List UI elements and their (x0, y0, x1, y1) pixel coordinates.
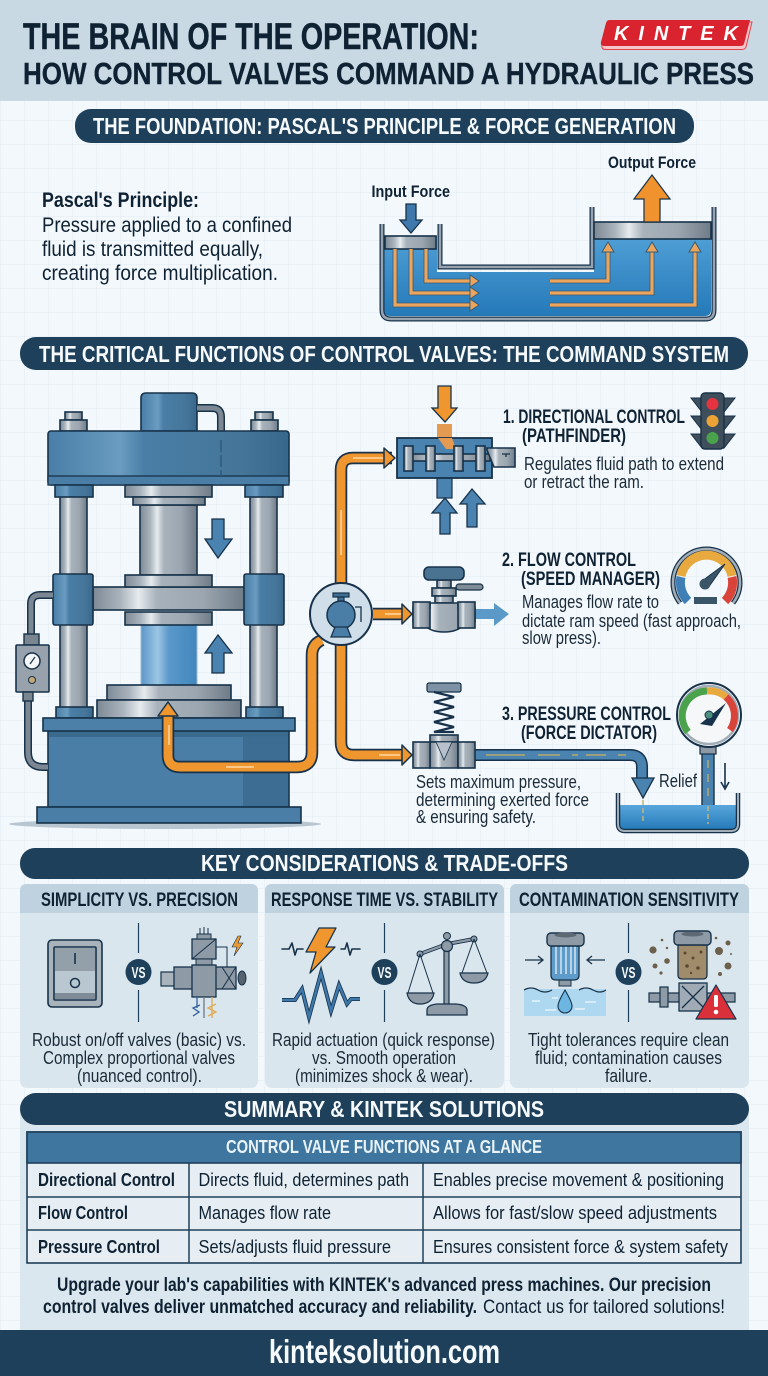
logo: KINTEK (601, 20, 752, 50)
blue outlet arrow (475, 603, 509, 626)
platen (97, 685, 241, 718)
description: (nuanced control). (77, 1066, 202, 1086)
bolts (60, 412, 278, 431)
spring cap (427, 683, 461, 692)
description: (minimizes shock & wear). (295, 1066, 473, 1086)
top port (437, 424, 452, 439)
table: valve functions: Sets/adjusts fluid pressure (198, 1236, 391, 1257)
table: valve functions: Directs fluid, determines path (198, 1169, 409, 1190)
valve body (430, 735, 458, 742)
knob (424, 567, 464, 580)
label: output force: Output Force (608, 153, 696, 172)
bottom port (437, 478, 452, 498)
label: input force: Input Force (372, 182, 450, 201)
divider and vs badge: VS (132, 965, 146, 982)
panel: contamination sensitivity (510, 884, 749, 1088)
hydraulic fluid column (141, 625, 197, 685)
icon: proportional valve (161, 927, 246, 1018)
top hose (197, 408, 221, 431)
icon: directional control valve (397, 386, 515, 534)
section heading: foundation (75, 109, 694, 143)
text block: directional control: 1. DIRECTIONAL CONTROL (503, 406, 685, 428)
divider and vs badge: VS (622, 965, 636, 982)
flow arrows: input (395, 248, 695, 305)
columns (60, 490, 277, 718)
text block: directional control: (PATHFINDER) (522, 425, 626, 447)
control box with gauge (16, 634, 49, 701)
table: valve functions: Directional Control (38, 1169, 175, 1190)
icon: relief tank and pressure gauge (618, 683, 741, 831)
description: fluid; contamination causes (535, 1048, 722, 1068)
text block: Pascal's principle: Pascal's Principle: (42, 189, 199, 212)
call to action: control valves deliver unmatched accuracy and reliability. (43, 1297, 477, 1318)
handle (456, 584, 483, 590)
icon: pressure relief valve (413, 683, 654, 798)
arrow: ram down (205, 519, 232, 558)
description: vs. Smooth operation (312, 1048, 456, 1068)
ram (140, 505, 197, 575)
text block: directional control: Regulates fluid path to extend (524, 454, 724, 474)
table: valve functions: CONTROL VALVE FUNCTIONS AT A GLANCE (226, 1137, 542, 1157)
top cylinder (141, 393, 197, 431)
input arrow (432, 386, 457, 422)
text block: Pascal's principle: fluid is transmitted equally, (42, 238, 263, 261)
actuator (487, 448, 515, 467)
moving crosshead (53, 574, 284, 625)
description (272, 1030, 495, 1086)
table: valve functions: Ensures consistent force & system safety (433, 1236, 729, 1257)
arrowheads (158, 448, 412, 765)
footer: kinteksolution.com (269, 1333, 500, 1370)
text block: pressure control: & ensuring safety. (416, 807, 536, 827)
top crown (48, 431, 289, 485)
right piston (594, 222, 711, 239)
description: Complex proportional valves (43, 1048, 235, 1068)
text block: pressure control: determining exerted force (416, 790, 589, 810)
arrow: output force (634, 175, 670, 222)
stem (437, 580, 451, 588)
illustration: hydraulic press (9, 393, 321, 829)
logo: KINTEK: KINTEK (614, 23, 740, 45)
icon: contaminated filter and warning (649, 931, 736, 1019)
top collars (55, 485, 283, 497)
fluid body (384, 222, 711, 316)
table: valve functions: Pressure Control (38, 1236, 160, 1257)
base (37, 718, 301, 823)
body (413, 603, 475, 632)
table: valve functions: Manages flow rate (198, 1202, 331, 1223)
base collars (56, 707, 283, 718)
section heading: key considerations (20, 848, 749, 879)
arrow: input force (400, 204, 422, 233)
description: Tight tolerances require clean (528, 1030, 729, 1050)
description: failure. (605, 1066, 652, 1086)
text block: flow control: Manages flow rate to (522, 592, 659, 612)
side hoses (28, 595, 53, 767)
title (23, 16, 754, 91)
arrow: ram up (205, 635, 232, 673)
text block: Pascal's principle: Pressure applied to a confined (42, 214, 292, 237)
text block: pressure control (416, 703, 671, 827)
blue relief line (475, 755, 642, 780)
icon: on/off switch (48, 940, 102, 1007)
table: valve functions (27, 1132, 741, 1263)
icon: pump (310, 583, 372, 645)
icon: traffic light (691, 393, 735, 449)
spool (404, 446, 490, 471)
text block: flow control (502, 549, 741, 648)
icon: flow control valve (413, 567, 509, 632)
section heading (20, 1093, 749, 1125)
call to action (43, 1275, 725, 1318)
icon: clean filter (524, 932, 606, 1016)
icon: speed gauge (673, 549, 740, 604)
section heading: SUMMARY & KINTEK SOLUTIONS (224, 1096, 544, 1122)
pipes: orange pressure lines (158, 448, 412, 767)
floor shadow (9, 819, 321, 829)
upper flange (125, 485, 212, 505)
text block: flow control: slow press). (522, 628, 601, 648)
section heading: key considerations: KEY CONSIDERATIONS & TRADE-OFFS (201, 850, 568, 876)
icon: lightning and pulses (282, 928, 360, 1017)
tank (618, 805, 738, 830)
divider and vs badge: VS (378, 965, 392, 982)
description: Robust on/off valves (basic) vs. (32, 1030, 246, 1050)
text block: pressure control: 3. PRESSURE CONTROL (502, 703, 671, 725)
text block: flow control: 2. FLOW CONTROL (502, 549, 636, 571)
description: Rapid actuation (quick response) (272, 1030, 495, 1050)
text block: Pascal's principle (42, 189, 292, 285)
heading: RESPONSE TIME VS. STABILITY (271, 890, 498, 911)
left piston (385, 236, 436, 249)
panel: response time vs stability (265, 884, 504, 1088)
text block: directional control: or retract the ram. (524, 472, 644, 492)
description (32, 1030, 246, 1086)
text block: flow control: (SPEED MANAGER) (521, 568, 660, 590)
up arrows (432, 498, 457, 534)
label: relief: Relief (659, 771, 698, 791)
title: THE BRAIN OF THE OPERATION: (23, 16, 479, 57)
text block: pressure control: (FORCE DICTATOR) (521, 722, 657, 744)
description (528, 1030, 729, 1086)
valve body (397, 438, 492, 478)
header band (0, 0, 768, 101)
icon: balance scales (407, 932, 488, 1015)
vessel walls (382, 207, 714, 319)
divider and vs badge (616, 923, 642, 1022)
text block: directional control (503, 406, 724, 492)
divider and vs badge (126, 923, 152, 1022)
table: valve functions: Enables precise movement & positioning (433, 1169, 724, 1190)
diagram: hydraulic force multiplication (372, 153, 714, 319)
heading: SIMPLICITY VS. PRECISION (41, 890, 238, 911)
text block: pressure control: Sets maximum pressure, (416, 772, 581, 792)
text block: Pascal's principle: creating force multiplication. (42, 262, 278, 285)
panel: simplicity vs precision (20, 884, 258, 1088)
spring (434, 692, 454, 732)
panel: summary and solutions (20, 1093, 749, 1331)
table: valve functions: Flow Control (38, 1202, 128, 1223)
call to action: Contact us for tailored solutions! (483, 1297, 725, 1318)
divider and vs badge (372, 923, 398, 1022)
footer (0, 1330, 768, 1376)
table: valve functions: Allows for fast/slow speed adjustments (433, 1202, 717, 1223)
